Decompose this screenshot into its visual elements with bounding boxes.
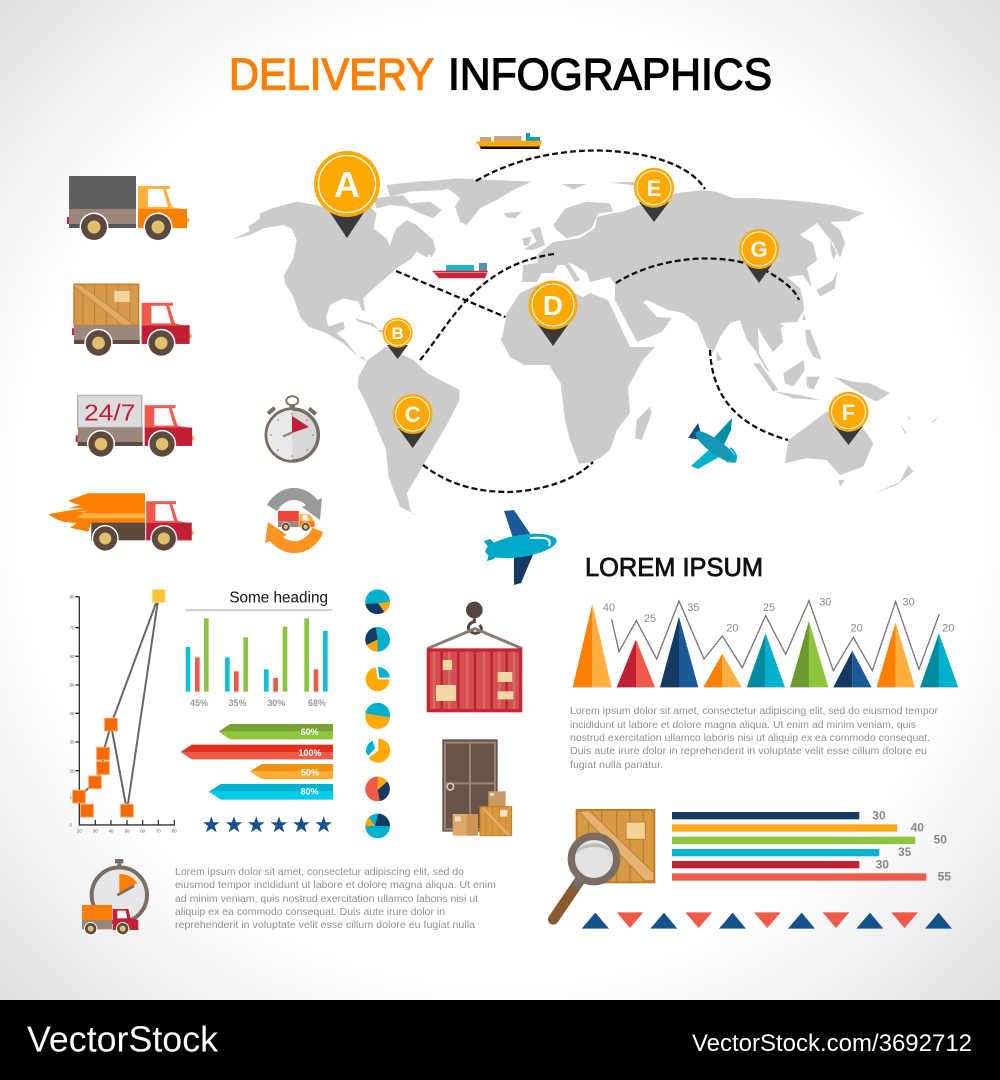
scatter line chart: 70 — [70, 625, 75, 630]
text block: right: incididunt ut labore et dolore magna aliqua. Ut enim ad minim veniam, quis — [570, 719, 916, 731]
scatter line chart: 70 — [156, 828, 161, 833]
pin G: G — [750, 237, 768, 262]
truck: fast with flames — [48, 493, 194, 552]
triangle chart — [573, 597, 958, 687]
horizontal bar chart: 30 — [876, 857, 889, 871]
triangle chart: 35 — [687, 602, 699, 614]
pin B: B — [391, 324, 404, 343]
horizontal bar chart — [672, 808, 951, 884]
pin B — [383, 318, 413, 359]
scatter line chart: 10 — [70, 795, 75, 800]
bar chart: some heading: Some heading — [229, 590, 328, 607]
arrow bars: 100% — [298, 748, 321, 758]
world map — [233, 178, 938, 517]
horizontal bar chart: 30 — [872, 808, 886, 822]
text block: bottom — [175, 866, 496, 931]
scatter line chart: 0 — [69, 823, 72, 828]
title — [229, 50, 772, 100]
pie charts column — [365, 589, 390, 838]
triangle chart: 25 — [763, 602, 775, 614]
text block: bottom: reprehenderit in voluptate velit esse cillum dolore eu fugiat nulla — [175, 919, 475, 931]
pin A — [314, 151, 380, 238]
icon: stopwatch with truck — [82, 859, 147, 935]
scatter line chart: 30 — [70, 740, 75, 745]
pin E — [634, 168, 674, 222]
bar chart: some heading: 30% — [267, 698, 285, 708]
arrow bars: 80% — [301, 787, 319, 797]
scatter line chart — [69, 590, 177, 833]
text block: right: nostrud exercitation ullamco laboris nisi ut aliquip ex ea commodo consequat. — [570, 732, 930, 744]
pin F — [828, 392, 868, 445]
pin G — [739, 229, 779, 283]
bar chart: some heading: 45% — [190, 698, 208, 708]
pin C: C — [405, 402, 421, 427]
truck: 24/7: 24/7 — [84, 400, 135, 426]
scatter line chart: 60 — [70, 654, 75, 659]
triangle chart: 20 — [851, 623, 863, 635]
scatter line chart: 40 — [109, 828, 114, 833]
pin C — [393, 394, 433, 448]
horizontal bar chart: 35 — [898, 845, 912, 859]
text block: right: Lorem ipsum dolor sit amet, consectetur adipiscing elit, sed do eiusmod tempor — [570, 705, 938, 717]
title: INFOGRAPHICS — [448, 50, 772, 100]
text block: right: Duis aute irure dolor in reprehenderit in voluptate velit esse cillum dolore eu — [570, 745, 927, 757]
text block: bottom: eiusmod tempor incididunt ut labore et dolore magna aliqua. Ut enim — [175, 879, 496, 891]
bar chart: some heading — [185, 590, 333, 708]
icon: cargo ship middle — [432, 263, 488, 278]
truck: tarp — [67, 176, 190, 242]
heading: lorem ipsum: LOREM IPSUM — [585, 552, 763, 582]
arrow bars — [181, 724, 333, 800]
pin E: E — [647, 176, 661, 201]
scatter line chart: 40 — [70, 711, 75, 716]
triangle pattern row — [582, 912, 952, 929]
arrow bars: 60% — [301, 727, 319, 737]
pin A: A — [334, 164, 360, 205]
watermark bar: VectorStock — [27, 1018, 219, 1060]
scatter line chart: 80 — [172, 828, 177, 833]
scatter line chart: 50 — [70, 683, 75, 688]
triangle chart: 30 — [903, 597, 915, 609]
pin D — [528, 280, 578, 346]
icon: return arrows with truck — [265, 494, 322, 547]
star rating — [203, 816, 332, 832]
watermark bar: VectorStock.com/3692712 — [692, 1030, 972, 1057]
scatter line chart: 30 — [93, 828, 98, 833]
horizontal bar chart: 55 — [938, 870, 951, 884]
horizontal bar chart: 40 — [911, 821, 924, 835]
icon: cargo ship top — [476, 133, 542, 149]
pin D: D — [543, 290, 563, 321]
icon: small plane — [688, 418, 740, 469]
scatter line chart: 50 — [125, 828, 130, 833]
watermark bar — [0, 1000, 1000, 1080]
text block: bottom: aliquip ex ea commodo consequat. Duis aute irure dolor in — [175, 906, 445, 918]
scatter line chart: 60 — [140, 828, 146, 833]
triangle chart: 20 — [726, 623, 738, 635]
icon: stopwatch — [266, 396, 318, 461]
truck: 24/7 — [76, 396, 195, 458]
text block: bottom: ad minim veniam, quis nostrud exercitation ullamco laboris nisi ut — [175, 893, 478, 905]
truck: crate — [72, 284, 192, 357]
scatter line chart: 20 — [70, 768, 75, 773]
horizontal bar chart: 50 — [934, 833, 947, 847]
text block: bottom: Lorem ipsum dolor sit amet, consectetur adipiscing elit, sed do — [175, 866, 464, 878]
icon: large plane — [484, 510, 558, 585]
triangle chart: 20 — [942, 623, 954, 635]
pin F: F — [842, 400, 855, 425]
triangle chart: 30 — [819, 597, 831, 609]
text block: right — [570, 705, 938, 771]
bar chart: some heading: 35% — [229, 698, 247, 708]
triangle chart: 25 — [644, 613, 656, 625]
title: DELIVERY — [229, 50, 434, 100]
scatter line chart: 20 — [77, 828, 82, 833]
triangle chart: 40 — [603, 602, 615, 614]
icon: hanging container — [427, 602, 522, 712]
scatter line chart: 80 — [70, 594, 75, 599]
dashed shipping routes — [396, 150, 799, 492]
bar chart: some heading: 68% — [308, 698, 326, 708]
arrow bars: 50% — [301, 767, 319, 777]
icon: door with parcels — [442, 739, 512, 836]
text block: right: fugiat nulla pariatur. — [570, 759, 663, 771]
icon: crate under magnifier — [553, 810, 654, 919]
